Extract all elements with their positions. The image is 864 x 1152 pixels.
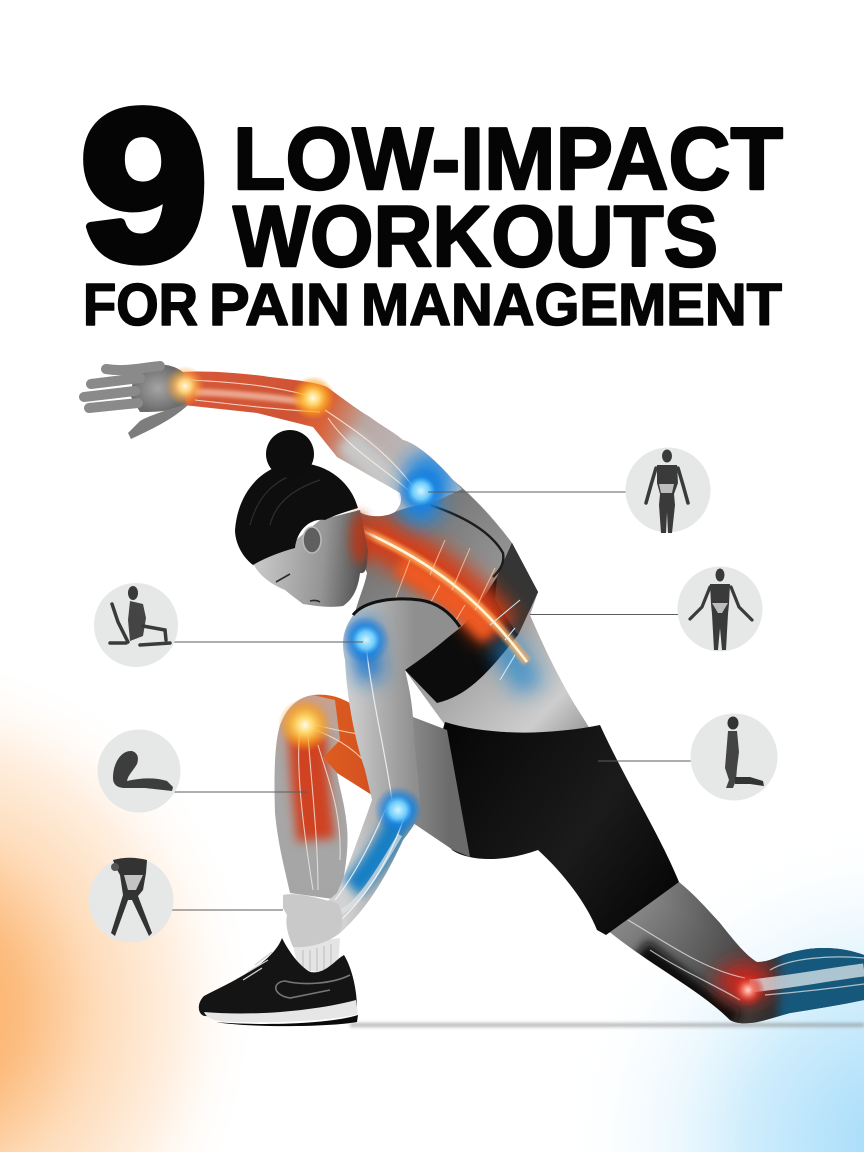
shorts — [437, 722, 679, 935]
connector lines — [150, 492, 708, 910]
icon: standing back pose — [626, 448, 710, 533]
spine glow — [362, 485, 530, 690]
front thigh — [313, 695, 470, 857]
title line: for pain management — [83, 272, 782, 338]
raised arm — [183, 372, 462, 512]
hair sheen — [250, 472, 320, 525]
title line: for pain management: FOR — [83, 272, 198, 338]
sock — [293, 938, 340, 972]
title line: for pain management: MANAGEMENT — [361, 272, 782, 338]
athlete figure — [84, 360, 864, 1030]
title line: workouts: WORKOUTS — [233, 189, 718, 285]
shoe — [199, 938, 358, 1026]
spine nerve fibres — [356, 528, 527, 680]
torso — [355, 440, 592, 732]
title numeral 9: 9 — [80, 66, 208, 305]
neck glow — [350, 512, 370, 564]
hair — [235, 463, 358, 565]
icon: arms out pose — [678, 566, 762, 652]
icon: wide stance pose — [88, 858, 174, 942]
hand on ankle — [283, 894, 342, 947]
lowered arm — [328, 600, 460, 933]
icon: seated twist pose — [94, 583, 178, 667]
title line: for pain management: PAIN — [209, 272, 350, 338]
ear — [303, 527, 321, 553]
title line: low-impact: LOW-IMPACT — [233, 109, 783, 208]
knee nerve lines — [310, 724, 365, 762]
rear leg — [610, 882, 864, 1024]
front shin — [274, 695, 348, 899]
face and neck — [253, 510, 368, 607]
ground shadow — [350, 1023, 864, 1027]
icon: child pose — [98, 730, 180, 812]
title — [80, 66, 783, 338]
icon: lunge pose — [690, 714, 778, 800]
bra shoulder strap — [353, 599, 460, 627]
sports bra — [405, 505, 538, 703]
joint glows — [165, 366, 445, 834]
hair bun — [266, 430, 314, 478]
hand — [84, 364, 188, 439]
